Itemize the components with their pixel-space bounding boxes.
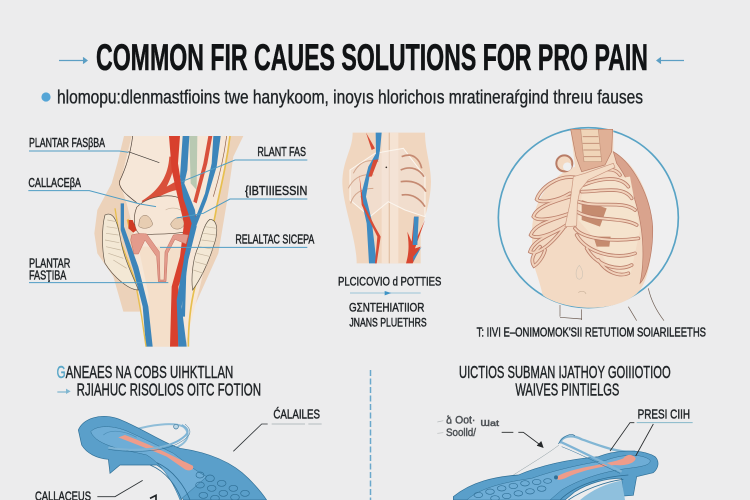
label: presi ciih: PRESI CIIH (638, 407, 690, 422)
label: note left: Ɯat (480, 418, 500, 428)
label: plantar fasciba lower (29, 256, 168, 283)
arrow: title left (59, 58, 87, 64)
inner pointer (128, 152, 159, 163)
navel (576, 265, 583, 279)
ribs left (348, 161, 378, 203)
label: plantar fasciba top: PLANTAR FASβBA (29, 136, 105, 150)
label: calailes: ĆALAILES (273, 407, 320, 422)
blue vein (177, 136, 197, 347)
label: note left (437, 414, 500, 439)
red artery (169, 136, 197, 347)
knee outer tissue (94, 136, 243, 347)
label: plantar fasciba lower: FASŢIBA (29, 269, 67, 283)
sandal body (453, 451, 658, 500)
heading arrow (57, 389, 71, 394)
femur branch (142, 157, 182, 206)
label: rlant fas (182, 145, 307, 182)
collar loop (556, 155, 572, 171)
plantar fascia highlight (118, 435, 193, 470)
outer back muscle (613, 152, 653, 283)
neck below circle (560, 288, 664, 321)
label: note left: ձ Oot· (446, 414, 475, 426)
left section heading: GANEAES NA COBS UIHKTLLAN (57, 362, 233, 382)
label: calaceus (35, 480, 143, 500)
label: callaceba: CALLACEβA (28, 176, 81, 190)
textured sole (474, 479, 552, 500)
lower leg bone (138, 247, 187, 347)
sandal footbed (91, 427, 207, 500)
label: calailes (233, 407, 322, 451)
torso body (342, 133, 431, 263)
right meniscus (192, 219, 217, 290)
arrow: note pointer (502, 432, 543, 447)
label: caption two: GΣNTEHIATIIOR (349, 301, 425, 315)
blue vessels (361, 133, 382, 263)
darker inner tissue (582, 200, 611, 247)
left meniscus (102, 214, 138, 290)
section divider (370, 370, 372, 500)
heel cavity (580, 481, 625, 500)
label: presi ciih (610, 407, 693, 456)
strap back (560, 436, 635, 452)
label: caption two: JNANS PLUETHRS (349, 315, 427, 329)
label: callaceba (28, 176, 156, 207)
chest cavity fill (578, 177, 640, 277)
label: plantar fasciba lower: PLANTAR (29, 256, 70, 270)
ribcage (530, 163, 638, 275)
panel: knee anatomy (28, 136, 315, 347)
left section heading: RJIAHUC RISOLIOS OITC FOTION (77, 380, 261, 400)
thigh green band (189, 136, 197, 190)
panel: torso anatomy (338, 128, 706, 340)
spine band (382, 133, 398, 263)
translucent rib overlay (350, 148, 425, 217)
label: rlant fas: RLANT FAS (257, 145, 306, 159)
panel: left solution (35, 362, 322, 500)
left vessels (121, 203, 153, 347)
sandal left (78, 416, 267, 500)
panel: right solution (437, 362, 693, 500)
red vessels (359, 133, 381, 263)
sandal body (78, 416, 267, 500)
right section heading (459, 362, 671, 400)
blue vessel right (182, 136, 221, 317)
inflamed joint point (128, 220, 137, 233)
arrow: title right (657, 58, 684, 64)
label: fibtiiessin (177, 184, 307, 218)
ribs outline (530, 169, 638, 275)
knee inner flesh (120, 136, 230, 347)
neck spine (571, 129, 613, 172)
pink ligaments (131, 234, 188, 282)
ribs fill (530, 169, 638, 275)
red vessel right (193, 136, 212, 203)
abdomen (532, 130, 653, 308)
right section heading: WAIVES PINTIELGS (515, 380, 619, 400)
arch lines (560, 475, 628, 500)
label: relaltac sicepa: RELALTAC SICEPA (235, 232, 315, 246)
thigh outline (119, 136, 137, 203)
caption divider (350, 291, 421, 295)
subtitle bullet (41, 92, 51, 102)
plantar fascia highlight (557, 455, 636, 480)
label: caption two (349, 301, 427, 329)
sternum (565, 163, 615, 227)
marker arrow (150, 495, 156, 500)
arch lines (150, 463, 190, 500)
sandal strap back (133, 424, 188, 452)
yellow nerves right (188, 136, 230, 347)
magnifier circle with ribcage (498, 128, 678, 308)
label: fibtiiessin: {IBTIIIESSIN (245, 184, 307, 198)
textured sole (196, 472, 249, 500)
label: note left: Soolld/ (446, 427, 476, 439)
left section heading (57, 362, 261, 400)
sandal right (453, 435, 658, 500)
strap front (560, 442, 622, 472)
femur condyles (134, 196, 194, 235)
ribs right (401, 155, 426, 207)
label: caption one: PLCICOVIO d POTTIES (338, 274, 441, 288)
footbed (467, 455, 650, 500)
lower right vessels (406, 217, 425, 263)
strap front (108, 425, 188, 450)
